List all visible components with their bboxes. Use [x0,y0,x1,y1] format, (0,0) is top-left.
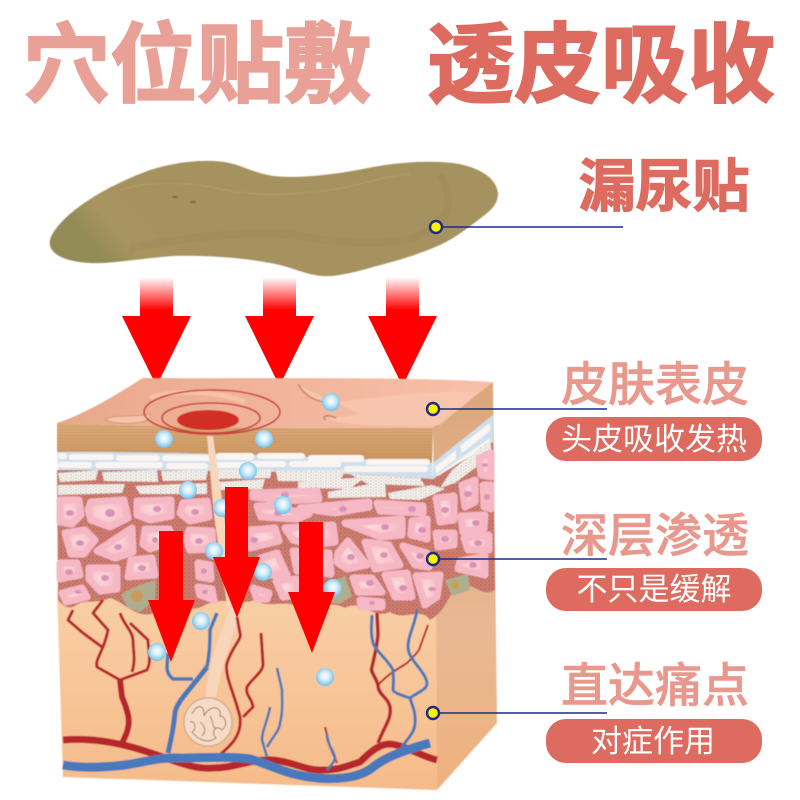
callout line: patch [430,221,623,233]
arrow: patch to skin right [368,277,437,386]
top face of skin [57,378,493,428]
arrow: into skin centre [213,487,260,618]
absorbed particles [148,393,342,686]
callout line: deep layer [427,553,607,565]
arrow: patch to skin left [122,277,191,386]
arrow: into skin right [288,522,335,653]
pigment cells [121,574,470,612]
arrow: patch to skin middle [245,277,314,386]
side face [433,382,497,790]
hair shaft and gland [184,436,240,746]
pill: not only relief [546,568,762,611]
pill: scalp absorbs heat [546,417,762,461]
pink epithelial cells [60,453,491,607]
label: patch name: 漏尿贴 [578,155,750,219]
callout line: pain point [427,707,607,719]
callout line: epidermis [427,403,607,415]
skin cross-section block [57,378,497,790]
label: reaches pain point: 直达痛点 [561,659,749,712]
title: transdermal absorption: 透皮吸收 [427,17,775,114]
pill: not only relief: 不只是缓解 [576,572,732,607]
label: epidermis: 皮肤表皮 [561,358,749,411]
acupoint target rings [144,390,280,434]
pill: scalp absorbs heat: 头皮吸收发热 [561,422,747,457]
dermis front [57,590,437,790]
white stratum band [57,415,493,480]
veins [63,610,430,779]
label: deep penetration: 深层渗透 [561,509,749,562]
patch illustration [50,161,498,276]
arrow: into skin left [148,531,195,662]
granular white cells [58,440,492,500]
pill: targeted effect [546,719,762,763]
pill: targeted effect: 对症作用 [591,724,715,759]
title: acupoint application: 穴位贴敷 [23,17,371,114]
cell nuclei [65,463,490,605]
arteries [63,600,437,770]
brown upper layer [57,423,433,463]
speckled cell bed [57,442,495,620]
